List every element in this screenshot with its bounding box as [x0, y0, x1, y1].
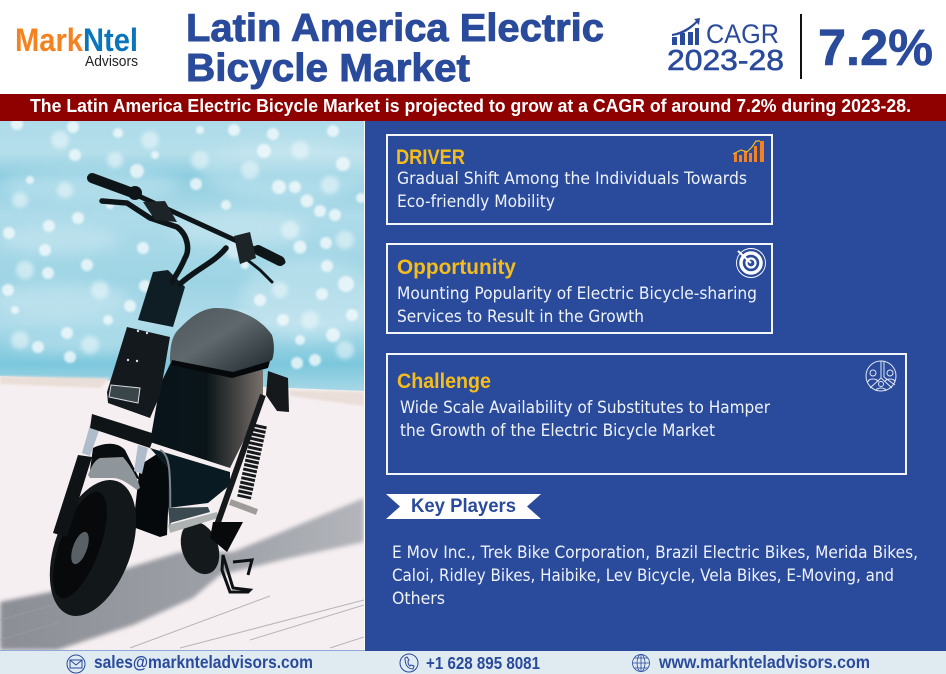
- kickstand: [222, 555, 252, 592]
- CAGR block: 2023-28: [667, 45, 784, 77]
- panel: driver: Gradual Shift Among the Individuals Towards: [397, 168, 747, 188]
- right panel: [365, 121, 946, 651]
- icon: email: [67, 655, 85, 673]
- front wheel: [50, 480, 136, 616]
- key players ribbon: [386, 494, 541, 519]
- handlebars: [92, 178, 283, 284]
- rear frame and pedal rack: [217, 395, 263, 525]
- header background: [0, 0, 946, 94]
- panel: challenge: Wide Scale Availability of Substitutes to Hamper: [400, 397, 770, 417]
- logo: MarkNtel Advisors: Advisors: [85, 54, 138, 70]
- icon: phone: [400, 654, 418, 672]
- front fender and forks: [90, 444, 140, 480]
- panel: opportunity: Mounting Popularity of Electric Bicycle-sharing: [397, 283, 757, 303]
- title: Latin America Electric: [186, 7, 604, 50]
- key players ribbon: Key Players: [411, 496, 516, 517]
- headlight panel: [107, 327, 170, 418]
- icon: people in circle: [866, 361, 896, 391]
- scooter body: [150, 362, 263, 468]
- key players list: [392, 542, 918, 608]
- rear wheel: [180, 523, 220, 574]
- footer: www.marknteladvisors.com: [658, 652, 870, 672]
- icon: target: [736, 248, 766, 278]
- panel: opportunity: Opportunity: [397, 256, 516, 279]
- icon: globe: [632, 654, 650, 672]
- summary banner: The Latin America Electric Bicycle Market is projected to grow at a CAGR of around 7.2% during 2023-28.: [30, 96, 911, 116]
- icon: growth chart with arrow: [672, 18, 700, 45]
- logo: MarkNtel Advisors: MarkNtel: [15, 22, 138, 58]
- panel: challenge: [387, 354, 906, 474]
- scooter floor: [135, 454, 168, 537]
- CAGR block: 7.2%: [818, 19, 933, 76]
- panel: challenge: Challenge: [397, 370, 491, 393]
- title: [186, 7, 604, 90]
- footer: +1 628 895 8081: [426, 653, 540, 673]
- key players list: Others: [392, 588, 445, 608]
- panel: opportunity: [387, 244, 772, 333]
- footer: sales@marknteladvisors.com: [94, 652, 313, 672]
- bike shadow: [0, 498, 364, 650]
- key players list: Caloi, Ridley Bikes, Haibike, Lev Bicycle, Vela Bikes, E-Moving, and: [392, 565, 894, 585]
- shock absorber: [244, 425, 260, 498]
- photo: electric bicycle by the sea: [0, 118, 380, 650]
- CAGR block: CAGR: [706, 19, 779, 49]
- panel: opportunity: Services to Result in the Growth: [397, 306, 644, 326]
- ground: [0, 376, 364, 650]
- footer: [0, 650, 946, 674]
- icon: orange bar chart: [733, 141, 764, 162]
- panel: driver: [387, 135, 772, 224]
- seat: [170, 308, 274, 373]
- title: Bicycle Market: [186, 47, 470, 90]
- CAGR block: [667, 14, 933, 79]
- panel: driver: DRIVER: [396, 146, 465, 169]
- steering head: [138, 270, 185, 327]
- panel: driver: Eco-friendly Mobility: [397, 191, 555, 211]
- panel: challenge: the Growth of the Electric Bicycle Market: [400, 420, 715, 440]
